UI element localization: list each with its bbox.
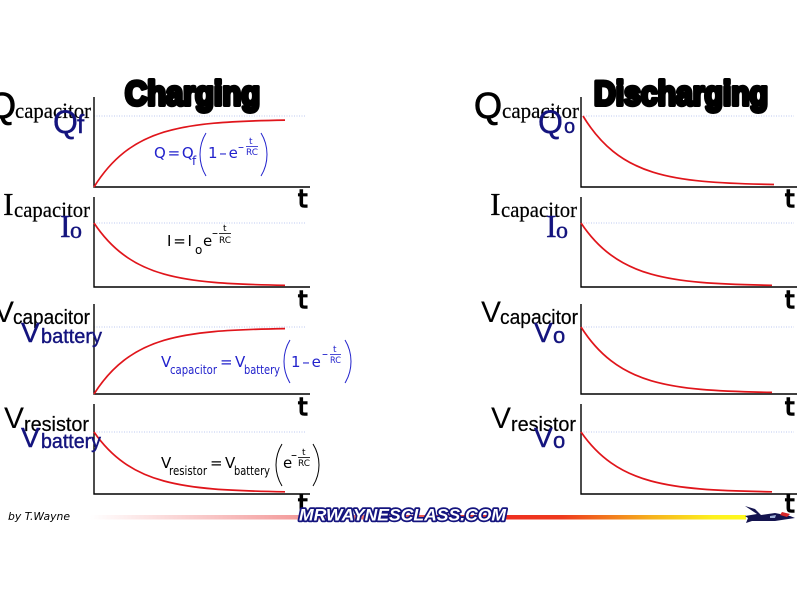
chart: discharging current: o [556,218,568,244]
chart: discharging capacitor voltage: capacitor [500,307,578,329]
chart: charging current: t [298,286,307,314]
equation: resistor voltage while charging: V [161,454,172,472]
chart: discharging current [490,186,797,314]
equation: capacitor voltage while charging: = [220,353,233,371]
chart: discharging charge on capacitor [474,85,797,213]
equation: current while charging: I = I [167,232,192,250]
chart: discharging charge on capacitor: t [785,185,794,213]
chart: discharging resistor voltage: o [553,428,565,453]
equation: capacitor voltage while charging: 1 – e [291,353,321,371]
chart: charging capacitor voltage: battery [41,326,102,348]
equation: charge while charging: f [192,154,197,168]
chart: discharging current: I [546,208,557,244]
chart: discharging capacitor voltage: V [534,317,553,348]
chart: discharging charge on capacitor: Q [474,85,502,126]
chart: charging capacitor voltage: t [298,393,307,421]
chart: charging charge on capacitor: capacitor [15,98,92,123]
author credit: by T.Wayne [8,510,70,523]
equation: capacitor voltage while charging [161,340,351,383]
equation: charge while charging: t [249,137,253,147]
chart: discharging resistor voltage: resistor [511,414,576,436]
chart: discharging resistor voltage: V [534,422,553,453]
chart: discharging resistor voltage: V [491,402,511,435]
equation: charge while charging: RC [246,148,258,158]
chart: discharging current: capacitor [501,197,578,222]
equation: capacitor voltage while charging: – [322,347,328,361]
equation: current while charging: – [212,226,218,240]
chart: discharging current: I [490,186,501,222]
equation: resistor voltage while charging: battery [234,464,270,478]
chart: charging resistor voltage: V [21,422,40,453]
chart: charging charge on capacitor: t [298,185,307,213]
chart: discharging charge on capacitor: Q [538,104,563,140]
equation: capacitor voltage while charging: V [161,353,172,371]
website wordmark: MRWAYNESCLASS.COM [299,506,507,524]
chart: charging charge on capacitor: f [77,109,85,139]
chart: discharging resistor voltage: t [785,490,794,518]
chart: charging capacitor voltage [0,296,310,421]
chart: discharging charge on capacitor: o [564,116,575,138]
chart: charging current: I [60,208,71,244]
chart: charging resistor voltage: V [4,402,24,435]
chart: charging capacitor voltage: V [21,317,40,348]
chart: discharging current: t [785,286,794,314]
chart: charging current: o [70,218,82,244]
chart: charging resistor voltage [4,402,310,518]
chart: charging current: I [3,186,14,222]
heading: Discharging: Discharging [594,75,768,113]
chart: charging charge on capacitor [0,85,310,213]
chart: charging resistor voltage: resistor [24,414,89,436]
equation: resistor voltage while charging: resistor [169,464,207,478]
chart: charging current [3,186,310,314]
equation: resistor voltage while charging: – [291,448,297,462]
equation: capacitor voltage while charging: V [235,353,246,371]
chart: charging capacitor voltage: capacitor [13,307,90,329]
equation: current while charging [167,224,231,257]
equation: capacitor voltage while charging: RC [330,356,341,366]
equation: capacitor voltage while charging: battery [244,363,280,377]
equation: capacitor voltage while charging: t [333,345,337,355]
chart: discharging resistor voltage [491,402,797,518]
chart: charging charge on capacitor: Q [53,104,78,140]
equation: charge while charging [154,133,267,176]
chart: charging current: capacitor [14,197,91,222]
chart: discharging charge on capacitor: capacitor [502,98,580,123]
equation: current while charging: t [223,224,227,234]
footer trail line [90,515,746,520]
equation: current while charging: e [203,232,212,250]
chart: discharging capacitor voltage: o [553,323,565,348]
equation: resistor voltage while charging [161,444,319,486]
chart: discharging capacitor voltage: t [785,393,794,421]
equation: charge while charging: 1 – e [208,144,238,162]
chart: charging resistor voltage: t [298,490,307,518]
equation: current while charging: RC [219,236,231,246]
equation: current while charging: o [195,243,202,257]
equation: resistor voltage while charging: RC [298,459,310,469]
chart: discharging capacitor voltage: V [481,296,501,329]
equation: charge while charging: – [238,140,244,154]
chart: charging resistor voltage: battery [41,431,101,453]
equation: capacitor voltage while charging: capacitor [170,363,217,377]
equation: resistor voltage while charging: e [283,454,292,472]
heading: Charging: Charging [125,75,260,113]
chart: discharging capacitor voltage [481,296,797,421]
equation: resistor voltage while charging: = [210,454,223,472]
equation: charge while charging: Q = Q [154,144,194,162]
equation: resistor voltage while charging: t [302,448,306,458]
equation: resistor voltage while charging: V [225,454,236,472]
icon: race car [745,506,795,523]
